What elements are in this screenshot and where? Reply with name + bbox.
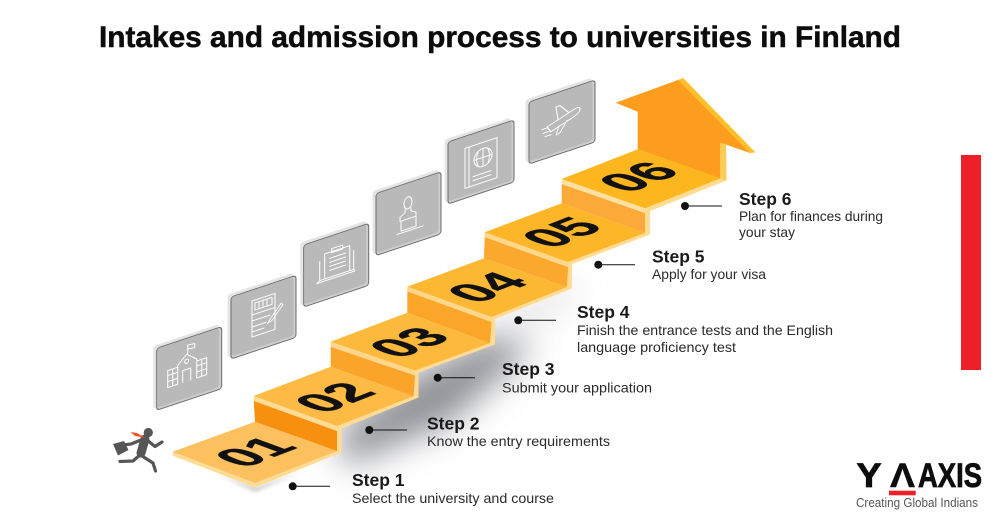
stair shadow (215, 280, 578, 491)
stair side edge (173, 145, 726, 488)
step 4 label: Step 4 (577, 302, 630, 322)
icon card: university building (153, 323, 222, 411)
step 3 label: Step 3 (502, 359, 555, 379)
logo: Y-Axis: Λ (890, 457, 915, 495)
riser 1 (254, 400, 337, 451)
riser 3 (407, 291, 492, 343)
step 4 label: Finish the entrance tests and the English (577, 322, 833, 338)
step 1 label: Select the university and course (352, 490, 554, 506)
step 6 label: Plan for finances during (739, 208, 883, 224)
arrow head (616, 78, 756, 180)
number 04: 04 (433, 267, 542, 308)
logo: Y-Axis (856, 457, 982, 510)
step 5 tread (485, 203, 645, 267)
title: Intakes and admission process to universities in Finland (99, 21, 901, 54)
step 1 label: Step 1 (352, 470, 405, 490)
staircase with arrow (173, 78, 755, 491)
step 2 label: Know the entry requirements (427, 433, 610, 449)
step 4 label (514, 302, 833, 355)
step 5 label (594, 246, 766, 282)
step 6 label: Step 6 (739, 189, 792, 209)
icon card: passport (444, 117, 514, 205)
riser 5 (562, 184, 645, 233)
number 01: 01 (201, 432, 310, 473)
icon card: airplane (526, 77, 595, 165)
step 6 label: your stay (739, 224, 795, 240)
icon card: application form (300, 220, 369, 308)
icon: running businessman (113, 428, 162, 471)
step 4 tread (407, 258, 567, 322)
step 6 tread (562, 149, 721, 213)
step 3 label (434, 359, 652, 396)
step 3 label: Submit your application (502, 380, 652, 396)
number 03: 03 (355, 322, 464, 363)
step 4 label: language proficiency test (577, 339, 736, 355)
icon card: test sheet (228, 272, 296, 360)
step 5 label: Apply for your visa (652, 266, 766, 282)
step 2 tread (254, 367, 414, 431)
riser 4 (484, 237, 568, 287)
step 2 label: Step 2 (427, 414, 480, 434)
step 1 tread (173, 422, 337, 483)
riser 2 (331, 347, 415, 396)
icon card: person at laptop (372, 168, 441, 257)
red side bar (961, 155, 981, 370)
step 6 label (681, 189, 883, 240)
step 5 label: Step 5 (652, 246, 705, 266)
logo: Y-Axis: AXIS (918, 457, 982, 495)
number 02: 02 (281, 377, 389, 418)
number 05: 05 (508, 212, 617, 253)
step 3 tread (331, 313, 490, 376)
logo: Y-Axis: Y (856, 457, 882, 495)
step 1 label (289, 470, 554, 506)
step 2 label (365, 414, 610, 449)
number 06: 06 (585, 157, 694, 198)
logo: Y-Axis: Creating Global Indians (856, 495, 978, 510)
